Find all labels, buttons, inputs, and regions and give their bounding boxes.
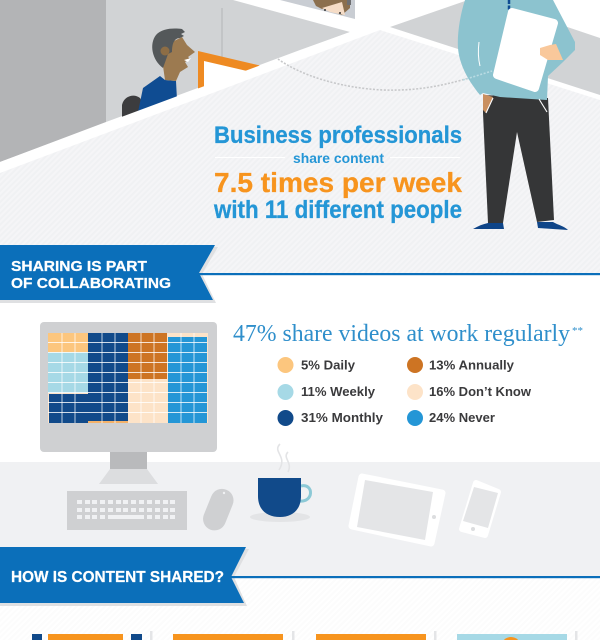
legend: annually: 13% Annually — [429, 358, 515, 372]
legend: don't know: 16% Don’t Know — [429, 384, 532, 399]
headline: business professionals: with 11 different people — [213, 196, 462, 224]
card 4 — [457, 631, 578, 640]
tablet held by man — [497, 12, 554, 88]
standing man holding tablet — [458, 0, 575, 230]
legend: daily: 5% Daily — [301, 358, 356, 372]
legend: weekly: 11% Weekly — [301, 384, 376, 399]
white diagonal floor edge — [0, 30, 600, 173]
card 1 — [32, 631, 152, 640]
chart title: ** — [572, 325, 583, 337]
coffee cup with steam — [250, 444, 311, 522]
chart title: 47% share videos at work regularly — [233, 321, 570, 347]
hand — [540, 44, 563, 60]
legend — [278, 357, 532, 426]
lanyard — [508, 0, 510, 10]
seated man talking — [122, 29, 195, 122]
card 3 — [316, 631, 436, 640]
lower hatched background — [0, 578, 600, 640]
card 2 — [173, 631, 294, 640]
banner: sharing is part of collaborating: SHARING IS PART — [11, 258, 147, 275]
keyboard — [67, 491, 187, 530]
smartphone on desk — [462, 483, 498, 535]
legend: daily — [278, 357, 356, 373]
headline: business professionals: Business professionals — [214, 122, 462, 149]
desk surface — [0, 462, 600, 577]
headline: business professionals: share content — [293, 150, 384, 166]
white section background below first banner — [0, 275, 600, 462]
shoes — [473, 223, 504, 229]
desktop computer with chart — [40, 322, 217, 484]
tablet on desk — [352, 477, 442, 543]
banner: how is content shared: HOW IS CONTENT SHARED? — [11, 569, 224, 586]
office cubicle walls — [0, 0, 600, 162]
banner: sharing is part of collaborating — [0, 245, 600, 303]
mouse — [200, 485, 237, 534]
headline: business professionals — [213, 122, 462, 224]
sweater — [458, 0, 575, 100]
legend: never: 24% Never — [429, 410, 495, 425]
legend: monthly: 31% Monthly — [301, 410, 384, 425]
dotted connector lines — [278, 0, 507, 90]
banner: sharing is part of collaborating: OF COLLABORATING — [11, 275, 171, 292]
coworker peeking over cubicle — [313, 0, 351, 15]
trousers — [483, 95, 554, 223]
orange computer monitor in cubicle — [198, 51, 262, 92]
sharing method cards (cropped) — [32, 631, 578, 640]
banner: how is content shared — [0, 547, 600, 606]
screen waffle chart — [48, 333, 208, 423]
pocket with hand — [483, 94, 493, 113]
headline: business professionals: 7.5 times per week — [214, 167, 462, 198]
hatched floor — [0, 30, 600, 275]
